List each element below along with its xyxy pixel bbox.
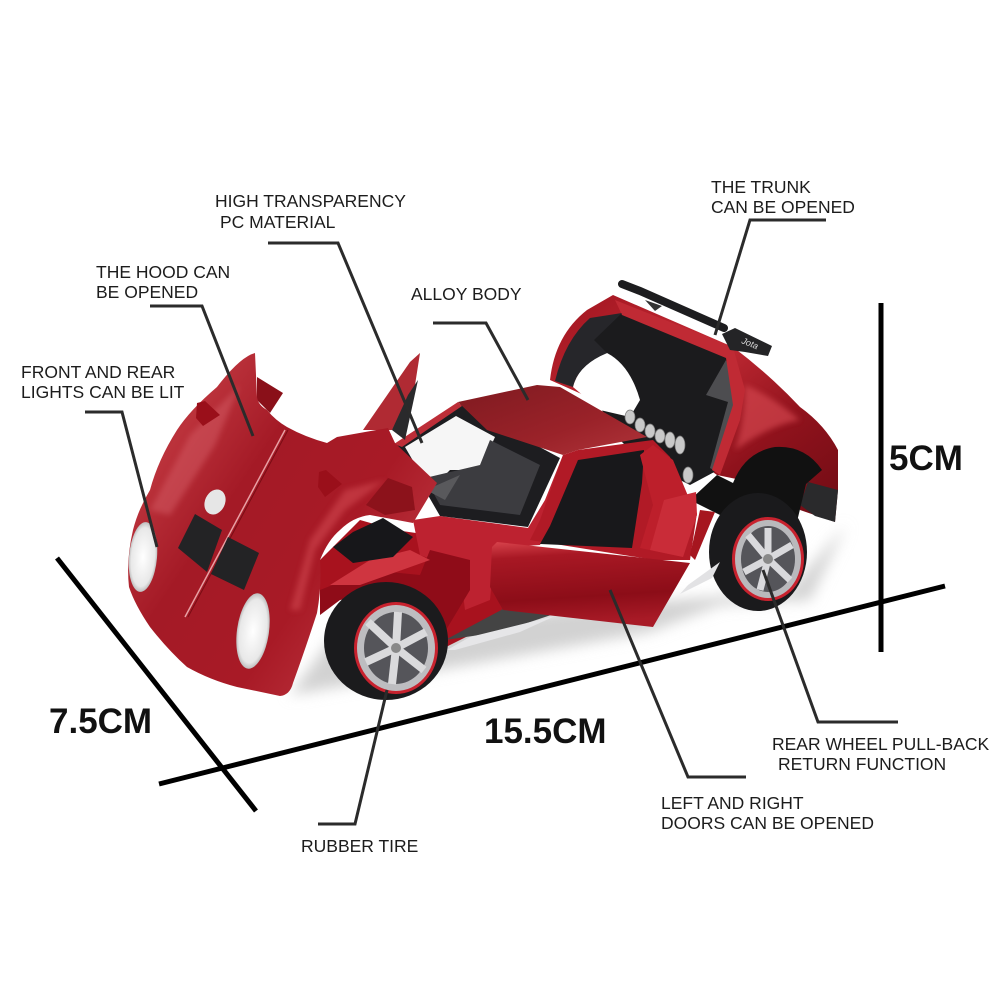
inner lid: [555, 313, 622, 387]
label: hood: THE HOOD CAN: [96, 262, 230, 282]
spoiler: [622, 284, 772, 356]
dimension: height: 5CM: [889, 439, 963, 478]
label: PC material: HIGH TRANSPARENCY: [215, 191, 406, 211]
open door: [490, 542, 690, 627]
trunk interior: [570, 313, 738, 485]
open hood: [126, 353, 437, 696]
roof: [458, 385, 647, 455]
door opening and pillars: [530, 440, 715, 560]
white see-through arch: [573, 353, 640, 417]
label: trunk: THE TRUNK: [711, 177, 811, 197]
rear wheel arch: [690, 447, 822, 530]
label: doors: LEFT AND RIGHT: [661, 793, 804, 813]
dimension lines: [57, 303, 945, 811]
hood centre seam: [185, 430, 285, 617]
front wheel: [324, 582, 448, 700]
chassis and engine bay: [320, 455, 720, 650]
hood pins: [196, 401, 220, 426]
chrome sill: [447, 616, 555, 650]
spoiler: Jota: [739, 335, 760, 351]
rear fender highlight: [735, 385, 800, 450]
hood badge: [200, 486, 230, 518]
windshield: [393, 402, 560, 527]
label: front and rear lights: LIGHTS CAN BE LIT: [21, 382, 185, 402]
chrome engine pipes: [625, 410, 693, 483]
under-door shadow: [445, 608, 560, 640]
rear wheel: [709, 493, 807, 611]
black battery box: [333, 518, 413, 563]
trunk red frame: [615, 300, 745, 475]
rear black lower valance: [800, 482, 838, 522]
label: rear wheel: REAR WHEEL PULL-BACK: [772, 734, 990, 754]
car model: [126, 284, 838, 700]
rear body and trunk lid: [550, 295, 838, 530]
label: PC material: PC MATERIAL: [220, 212, 336, 232]
leader lines: [85, 220, 898, 824]
hood hinge flap: [257, 377, 283, 413]
label: trunk: CAN BE OPENED: [711, 197, 855, 217]
label: doors: DOORS CAN BE OPENED: [661, 813, 874, 833]
hood intakes: [178, 514, 222, 572]
dimension: width: 7.5CM: [49, 702, 152, 741]
rivet patch: [366, 478, 415, 515]
hood highlight: [150, 385, 240, 515]
label: front and rear lights: FRONT AND REAR: [21, 362, 175, 382]
right headlight: [232, 591, 274, 671]
car ground shadow: [290, 525, 846, 695]
label: rear wheel: RETURN FUNCTION: [778, 754, 946, 774]
trunk grey panel: [706, 360, 738, 472]
label: alloy body: ALLOY BODY: [411, 284, 522, 304]
hood shell: [128, 353, 437, 696]
raised left hood panel: [363, 353, 420, 440]
label: hood: BE OPENED: [96, 282, 198, 302]
label: rubber tire: RUBBER TIRE: [301, 836, 418, 856]
dimension: length: 15.5CM: [484, 712, 607, 751]
left headlight: [126, 521, 160, 593]
